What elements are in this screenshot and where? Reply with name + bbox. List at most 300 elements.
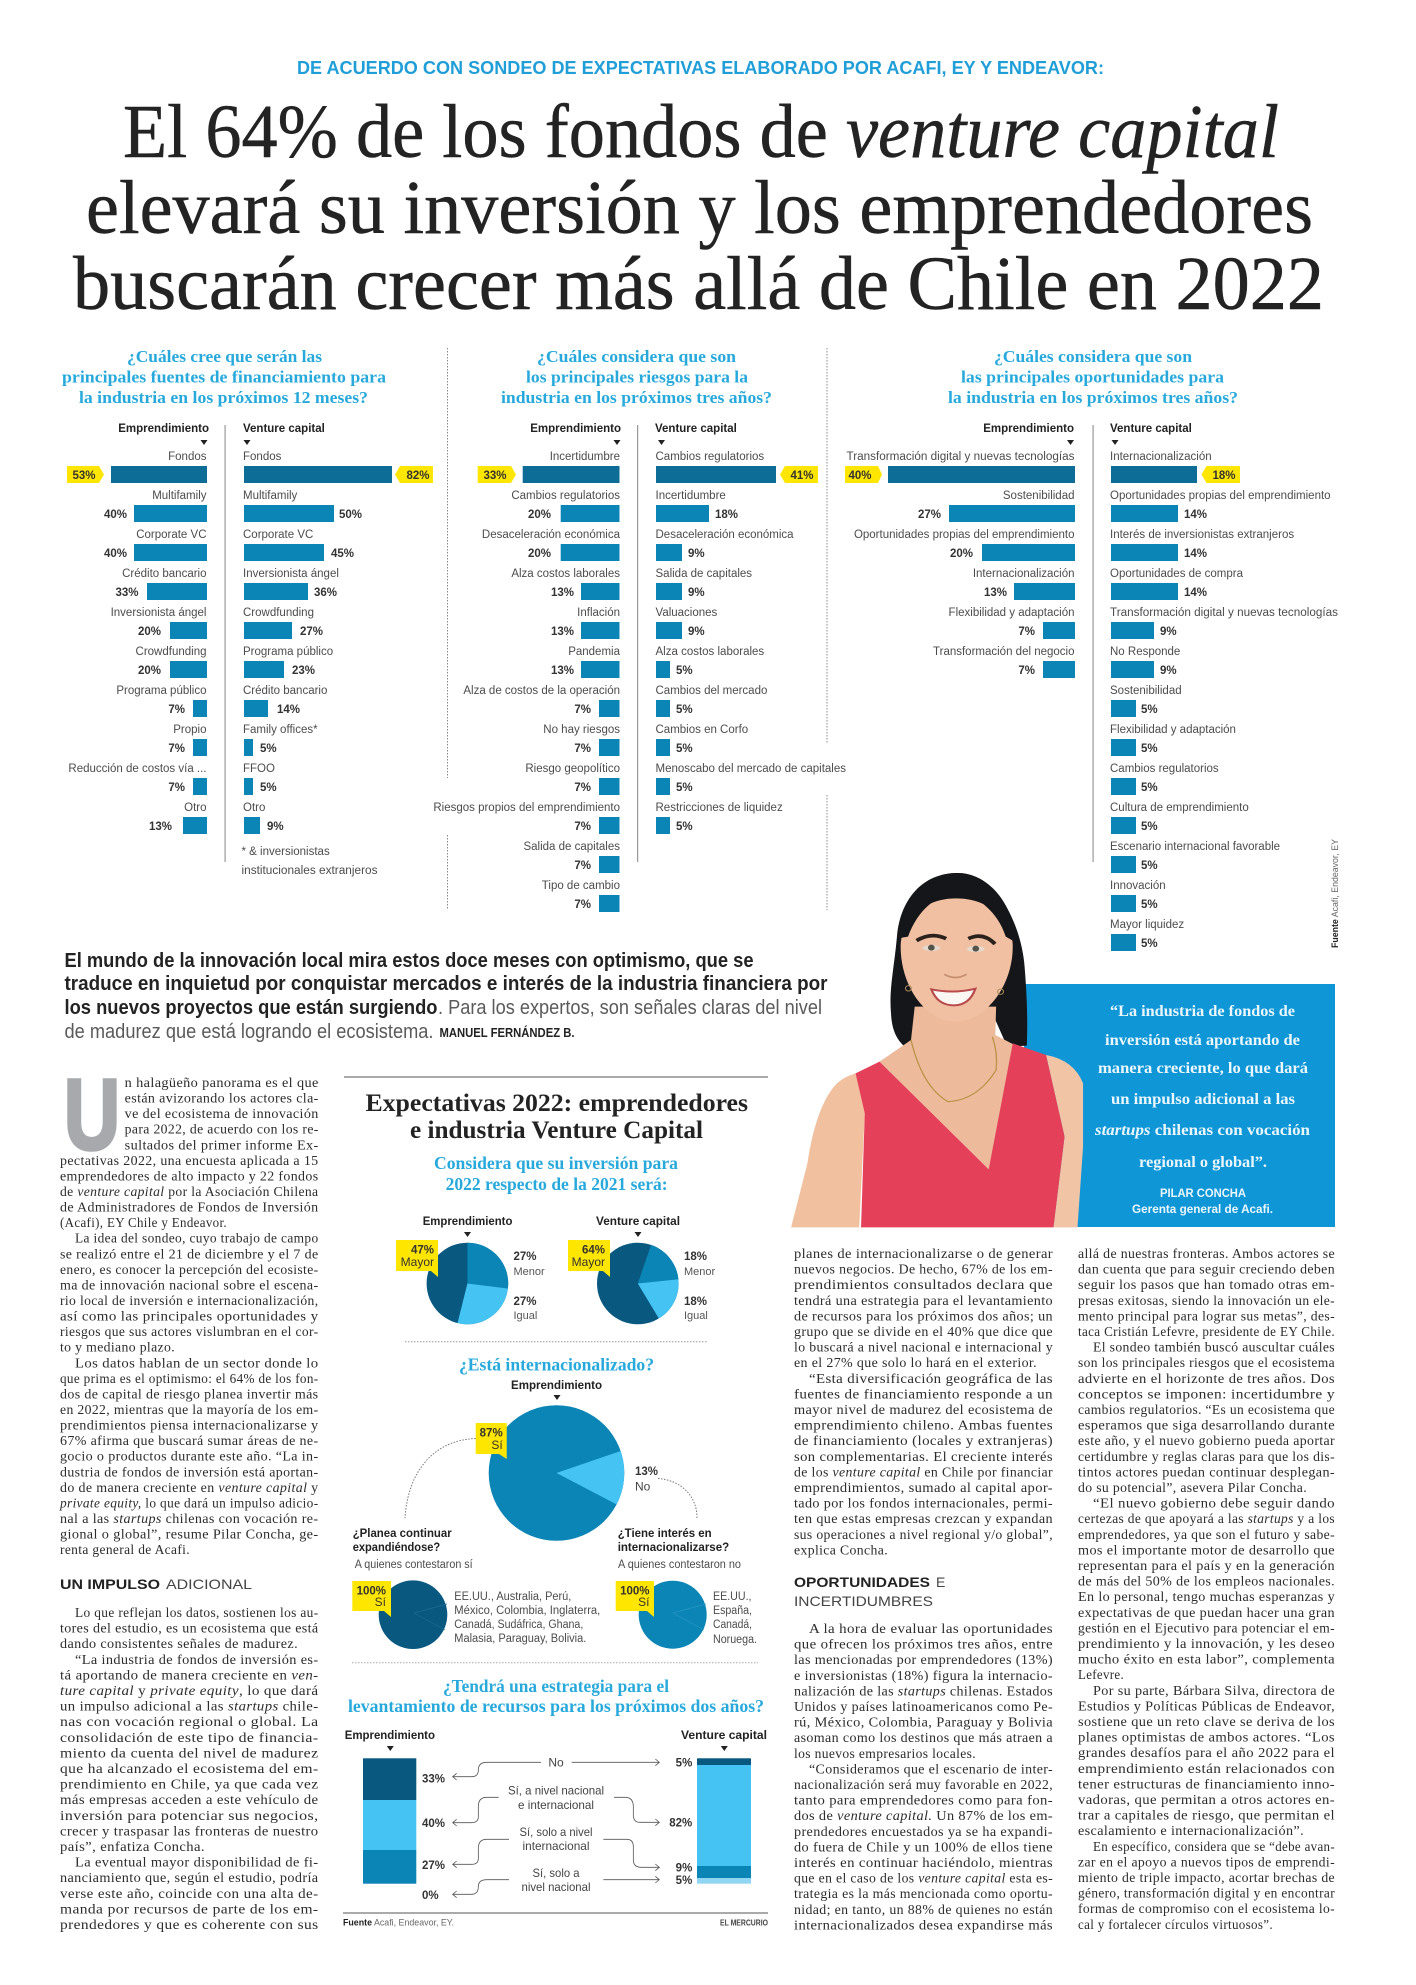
paragraph: sondeo riesgos: El sondeo también buscó auscultar cuáles [1093,1340,1335,1355]
bar chart: riesgos emprendimiento: Riesgos propios del emprendimiento [433,802,620,814]
bar chart: riesgos emprendimiento: Incertidumbre [550,451,620,463]
bar chart: oportunidades venture capital: 14% [1184,548,1207,560]
bar chart: financiamiento venture capital: 50% [339,509,362,521]
title: El 64% de los fondos de venture capital [123,90,1279,174]
paragraph: opening: de venture capital por la Asociación Chilena [60,1184,318,1199]
paragraph: nuevo gobierno [1078,1496,1335,1682]
block: interés en internacionalizarse: EE.UU., [713,1591,752,1603]
title [73,90,1324,326]
block: planea continuar: México, Colombia, Inglaterra, [454,1605,600,1617]
bar chart: oportunidades venture capital: Transformación digital y nuevas tecnologías [1110,607,1338,619]
bar chart: riesgos emprendimiento: 7% [574,860,591,872]
paragraph: datos: en 2022, mientras que la mayoría de los em- [60,1402,319,1417]
paragraph: consideramos: prendedores encuestados ya se ha expandi- [794,1824,1053,1839]
bar chart: financiamiento emprendimiento: 40% [104,509,127,521]
bar chart: riesgos venture capital: Cambios en Corfo [656,724,748,736]
paragraph: sondeo riesgos: certidumbre y reglas claras para que los dis- [1078,1449,1335,1464]
paragraph: a la hora: Unidos y países latinoamericanos como Pe- [794,1699,1053,1714]
heading: financiamiento: la industria en los próximos 12 meses? [79,388,368,407]
panel: Expectativas 2022 infographic: Emprendimiento [511,1380,602,1392]
bar chart: financiamiento emprendimiento: 20% [138,626,161,638]
paragraph: eventual [60,1855,319,1932]
paragraph: opening [60,1075,319,1230]
paragraph: sondeo riesgos: esperamos que siga desarrollando durante [1078,1418,1335,1433]
bar chart: riesgos venture capital: 5% [676,704,693,716]
panel: oportunidades: Emprendimiento [983,423,1074,435]
block: interés en internacionalizarse [616,1528,757,1649]
paragraph: quote: crecer y traspasar las fronteras de nuestro [60,1823,318,1838]
bar chart: oportunidades emprendimiento: Transformación del negocio [933,646,1074,658]
heading: estrategia [348,1676,764,1716]
bar chart: financiamiento emprendimiento: Propio [173,724,206,736]
paragraph: sondeo riesgos: advierte en el horizonte de tres años. Dos [1078,1371,1335,1386]
panel: Expectativas 2022 infographic: Emprendimiento [345,1730,435,1742]
bar chart: riesgos emprendimiento: Pandemia [568,646,621,658]
block: interés en internacionalizarse: Canadá, [713,1619,752,1631]
pie: emprendimiento inversión: 27% [514,1251,537,1263]
bar chart: oportunidades venture capital: 5% [1141,821,1158,833]
paragraph: eventual: manda por recursos de parte de los em- [60,1901,319,1916]
intro paragraph: de madurez que está logrando el ecosistema. [64,1021,434,1043]
bar chart: riesgos emprendimiento: 7% [574,743,591,755]
bar chart: oportunidades venture capital: 5% [1141,782,1158,794]
bar chart: oportunidades emprendimiento: 20% [950,548,973,560]
paragraph: a la hora: nalización de las startups chilenas. Estados [794,1683,1053,1698]
bar chart: riesgos emprendimiento: No hay riesgos [543,724,620,736]
intro paragraph: los nuevos proyectos que están surgiendo [64,997,438,1019]
heading: riesgos: los principales riesgos para la [526,368,748,386]
paragraph: allá: mento principal para lograr sus metas”, des- [1078,1308,1335,1323]
bar chart: riesgos venture capital: Cambios regulatorios [656,451,764,463]
heading: estrategia: ¿Tendrá una estrategia para el [443,1676,669,1696]
panel: riesgos: Venture capital [655,423,737,435]
bar chart: financiamiento emprendimiento: 33% [115,587,138,599]
paragraph: allá: dan cuenta que para seguir creciendo deben [1078,1262,1335,1277]
paragraph: diversificación: ten que estas empresas crezcan y expandan [794,1511,1053,1526]
paragraph: diversificación: sus operaciones a nivel regional y/o global”, [794,1527,1053,1542]
pie: emprendimiento inversión [396,1240,545,1324]
paragraph: diversificación: fuentes de financiamiento responde a un [794,1386,1053,1401]
bar chart: financiamiento venture capital: 27% [300,626,323,638]
bar chart: oportunidades emprendimiento: 40% [848,470,872,482]
quote text: startups chilenas con vocación [1094,1122,1310,1139]
block: planea continuar: ¿Planea continuar [353,1528,452,1540]
paragraph: opening: n halagüeño panorama es el que [125,1075,319,1090]
heading: riesgos: ¿Cuáles considera que son [537,347,736,366]
bar chart: financiamiento venture capital: 82% [406,470,430,482]
paragraph: eventual: prendedores y que es coherente con sus [60,1917,318,1932]
subheading: oportunidades e incertidumbres: INCERTIDUMBRES [794,1593,933,1609]
pie: venture capital inversión: Menor [684,1266,716,1278]
bar chart: financiamiento emprendimiento: Programa público [116,685,206,697]
paragraph: Bárbara Silva: planes optimistas de ambos actores. “Los [1078,1730,1335,1745]
paragraph: quote: ture capital y private equity , lo que dará [60,1683,318,1698]
paragraph: sondeo riesgos: conceptos se imponen: incertidumbre y [1078,1386,1335,1401]
bar chart: financiamiento venture capital: Crowdfunding [243,607,314,619]
quote attribution [1132,1188,1273,1216]
paragraph: allá [1078,1246,1335,1339]
stacked bar: emprendimiento: 40% [422,1818,445,1830]
bar chart: riesgos emprendimiento: 20% [528,548,551,560]
heading: oportunidades: las principales oportunidades para [961,368,1224,386]
bar chart: oportunidades venture capital: 5% [1141,704,1158,716]
paragraph: Bárbara Silva: vadoras, que permitan a otros actores en- [1078,1792,1335,1807]
bar chart: riesgos emprendimiento: 13% [551,587,574,599]
pie: emprendimiento inversión: 47% [411,1244,434,1256]
heading: considera: 2022 respecto de la 2021 será: [446,1174,668,1194]
paragraph: consideramos: nacionalización será muy favorable en 2022, [794,1777,1053,1792]
paragraph: consideramos: trategia es la más mencionada como oportu- [794,1886,1053,1901]
photo: Pilar Concha portrait [791,873,1083,1227]
bar chart: riesgos venture capital: 5% [676,782,693,794]
paragraph: datos: dos de capital de riesgo planea invertir más [60,1386,318,1401]
bar chart: riesgos emprendimiento: Riesgo geopolítico [525,763,620,775]
panel: oportunidades [845,347,1341,951]
bar chart: financiamiento venture capital: Otro [243,802,265,814]
credit: EL MERCURIO [720,1918,768,1928]
bar chart: oportunidades venture capital: Internacionalización [1110,451,1212,463]
paragraph: quote: “La industria de fondos de inversión es- [75,1652,319,1667]
bar chart: riesgos venture capital: 9% [688,548,705,560]
bar chart: riesgos emprendimiento: Alza de costos de la operación [463,685,620,697]
bar chart: financiamiento venture capital: Corporate VC [243,529,313,541]
bar chart: financiamiento emprendimiento: 13% [149,821,172,833]
paragraph: sondeo: La idea del sondeo, cuyo trabajo de campo [75,1231,318,1246]
bar chart: financiamiento emprendimiento [67,451,207,834]
bar chart: oportunidades venture capital: 5% [1141,860,1158,872]
paragraph: a la hora: e inversionistas (18%) figura la internacio- [794,1668,1053,1683]
bar chart: riesgos venture capital: 5% [676,665,693,677]
bar chart: riesgos venture capital: Incertidumbre [656,490,726,502]
intro paragraph: MANUEL FERNÁNDEZ B. [440,1025,574,1040]
footnote: * & inversionistas [242,846,330,858]
intro paragraph: traduce en inquietud por conquistar mercados e interés de la industria financiera por [64,973,828,995]
pie: venture capital inversión: 18% [684,1251,707,1263]
bar chart: riesgos emprendimiento [433,451,621,912]
bar chart: oportunidades emprendimiento: Sostenibilidad [1003,490,1074,502]
paragraph: sondeo riesgos: do su potencial”, asevera Pilar Concha. [1078,1480,1307,1495]
bar chart: riesgos venture capital: Valuaciones [656,607,718,619]
bar chart: financiamiento emprendimiento: Otro [184,802,206,814]
stacked bar: emprendimiento [363,1758,445,1902]
bar chart: oportunidades venture capital [1110,451,1338,951]
bar chart: riesgos emprendimiento: 7% [574,821,591,833]
heading: financiamiento: ¿Cuáles cree que serán las [127,347,323,366]
pie: emprendimiento inversión: 27% [514,1296,537,1308]
paragraph: planes: tendrá una estrategia para el levantamiento [794,1293,1053,1308]
paragraph: eventual: La eventual mayor disponibilidad de fi- [75,1855,319,1870]
bar chart: financiamiento venture capital: 23% [292,665,315,677]
subheading: oportunidades e incertidumbres: E [936,1574,945,1590]
paragraph: opening: emprendedores de alto impacto y 22 fondos [60,1168,318,1183]
paragraph: diversificación: de los venture capital en Chile por financiar [794,1464,1053,1479]
paragraph: quote: más empresas acceden a este vehículo de [60,1792,318,1807]
paragraph: a la hora: rú, México, Colombia, Paraguay y Bolivia [794,1715,1053,1730]
paragraph: sondeo riesgos: tintos actores puedan continuar desplegan- [1078,1464,1335,1479]
bar chart: riesgos venture capital: Cambios del mercado [656,685,767,697]
pie: emprendimiento inversión: Menor [514,1266,545,1278]
paragraph: diversificación: son complementarias. El creciente interés [794,1449,1053,1464]
panel: riesgos [433,347,846,912]
paragraph: consideramos [794,1761,1053,1932]
paragraph: sondeo riesgos: este año, y el nuevo gobierno pueda aportar [1078,1433,1335,1448]
block: interés en internacionalizarse: internacionalizarse? [618,1542,729,1554]
stacked bar: venture capital: 82% [669,1818,692,1830]
block: interés en internacionalizarse: A quienes contestaron no [618,1559,741,1571]
paragraph: quote: consolidación de este tipo de financia- [60,1730,319,1745]
subheading: un impulso adicional: UN IMPULSO [60,1576,160,1592]
bar chart: riesgos venture capital: 41% [790,470,814,482]
paragraph: consideramos: nidad; en tanto, un 88% de quienes no están [794,1902,1053,1917]
heading: financiamiento [62,347,386,407]
bar chart: oportunidades emprendimiento: Flexibilidad y adaptación [949,607,1074,619]
block: planea continuar: Canadá, Sudáfrica, Ghana, [454,1619,583,1631]
block: interés en internacionalizarse: ¿Tiene interés en [618,1528,712,1540]
paragraph: opening: están avizorando los actores cla- [125,1091,319,1106]
bar chart: oportunidades venture capital: 5% [1141,899,1158,911]
pie: venture capital inversión: Igual [684,1310,708,1322]
bar chart: financiamiento venture capital: 5% [260,743,277,755]
heading: oportunidades: la industria en los próximos tres años? [948,388,1238,407]
strategy category labels [508,1756,604,1894]
body text: column 3 [1078,1246,1335,1932]
paragraph: en específico: formas de compromiso con el ecosistema lo- [1078,1901,1335,1916]
paragraph: planes: prendimientos consultados declara que [794,1277,1053,1292]
paragraph: diversificación: emprendimiento chileno. Ambas fuentes [794,1418,1053,1433]
bar chart: financiamiento emprendimiento: Inversionista ángel [111,607,206,619]
paragraph: datos: dustria de fondos de inversión está aportan- [60,1464,319,1479]
bar chart: oportunidades emprendimiento: Internacionalización [973,568,1074,580]
paragraph: quote: un impulso adicional a las startups chile- [60,1699,319,1714]
paragraph: planes: en el 27% que solo lo hará en el exterior. [794,1355,1037,1370]
strategy category labels: No [548,1756,564,1770]
paragraph: Bárbara Silva [1078,1683,1335,1838]
bar chart: financiamiento venture capital: 9% [267,821,284,833]
bar chart: financiamiento venture capital: Crédito bancario [243,685,327,697]
drop cap: U [64,1059,120,1171]
paragraph: allá: seguir los pasos que han tomado otras em- [1078,1277,1335,1292]
paragraph: quote: país”, enfatiza Concha. [60,1839,205,1854]
bar chart: riesgos venture capital: 9% [688,587,705,599]
paragraph: Bárbara Silva: emprendimiento están relacionados con [1078,1761,1335,1776]
paragraph: nuevo gobierno: certezas de que apoyará a las startups y a los [1078,1511,1335,1526]
bar chart: oportunidades emprendimiento: 7% [1018,626,1035,638]
bar chart: financiamiento venture capital: Programa público [243,646,333,658]
bar chart: riesgos emprendimiento: Tipo de cambio [542,880,620,892]
bar chart: riesgos emprendimiento: Salida de capitales [523,841,620,853]
bar chart: financiamiento emprendimiento: Reducción de costos vía ... [68,763,206,775]
paragraph: nuevo gobierno: de más del 50% de los empleos nacionales. [1078,1574,1335,1589]
heading: estrategia: levantamiento de recursos para los próximos dos años? [348,1696,764,1716]
bar chart: oportunidades venture capital: 14% [1184,587,1207,599]
panel: fuentes de financiamiento: Venture capital [243,423,325,435]
paragraph: allá: taca Cristián Lefevre, presidente de EY Chile. [1078,1324,1335,1339]
paragraph: diversificación: tado por los fondos internacionales, permi- [794,1496,1053,1511]
pie: venture capital inversión [568,1240,716,1324]
bar chart: riesgos emprendimiento: 7% [574,899,591,911]
bar chart: financiamiento emprendimiento: 7% [168,743,185,755]
paragraph: consideramos: dos de venture capital. Un 87% de los em- [794,1808,1053,1823]
bar chart: oportunidades emprendimiento: 13% [984,587,1007,599]
stacked bar: venture capital: 5% [676,1758,692,1770]
paragraph: Bárbara Silva: Por su parte, Bárbara Silva, directora de [1093,1683,1335,1698]
bar chart: oportunidades emprendimiento: 7% [1018,665,1035,677]
paragraph: a la hora: que ofrecen los próximos tres años, entre [794,1637,1053,1652]
bar chart: riesgos emprendimiento: 7% [574,704,591,716]
pie: emprendimiento inversión: Mayor [401,1255,434,1269]
paragraph: datos: do de manera creciente en venture capital y [60,1480,318,1495]
paragraph: nuevo gobierno: representan para el país y en la generación [1078,1558,1335,1573]
bar chart: oportunidades emprendimiento: Transformación digital y nuevas tecnologías [846,451,1075,463]
pie: venture capital inversión: Mayor [572,1255,605,1269]
subheading: oportunidades e incertidumbres [794,1574,945,1609]
paragraph: Bárbara Silva: trar a capitales de riesgo, que permitan el [1078,1808,1335,1823]
bar chart: oportunidades venture capital: 5% [1141,938,1158,950]
paragraph: en específico: En específico, considera que se “debe avan- [1093,1839,1335,1854]
block: planea continuar [352,1528,600,1649]
paragraph: consideramos: internacionalizados desea expandirse más [794,1917,1053,1932]
bar chart: oportunidades venture capital: Oportunidades de compra [1110,568,1244,580]
paragraph: Bárbara Silva: tener estructuras de financiamiento inno- [1078,1776,1335,1791]
subheading: un impulso adicional [60,1576,252,1592]
quote text: regional o global”. [1139,1154,1267,1171]
paragraph: quote [60,1652,319,1854]
block: planea continuar: expandiéndose? [353,1542,440,1554]
bar chart: riesgos venture capital: 18% [715,509,738,521]
block: planea continuar: A quienes contestaron sí [355,1559,473,1571]
bar chart: financiamiento emprendimiento: Corporate VC [136,529,206,541]
strategy category labels: nivel nacional [522,1880,590,1894]
paragraph: a la hora: los nuevos empresarios locales. [794,1746,976,1761]
paragraph: opening: (Acafi), EY Chile y Endeavor. [60,1215,227,1230]
bar chart: financiamiento venture capital: 45% [331,548,354,560]
heading: financiamiento: principales fuentes de financiamiento para [62,368,386,386]
quote text: “La industria de fondos de [1110,1003,1295,1020]
paragraph: nuevo gobierno: mos el importante motor de desarrollo que [1078,1542,1335,1557]
bar chart: oportunidades venture capital: 5% [1141,743,1158,755]
paragraph: en específico: miento de triple impacto, acortar brechas de [1078,1870,1335,1885]
paragraph: planes [794,1246,1053,1370]
block: interés en internacionalizarse: Noruega. [713,1634,757,1646]
paragraph: opening: para 2022, de acuerdo con los re- [125,1122,319,1137]
panel: quote box [1024,984,1335,1227]
pie: está internacionalizado: 87% [480,1428,503,1440]
block: interés en internacionalizarse: España, [713,1605,752,1617]
paragraph: sondeo: así como las principales oportunidades y [60,1309,318,1324]
bar chart: financiamiento venture capital: Inversionista ángel [243,568,339,580]
paragraph: planes: nuevos negocios. De hecho, 67% de los em- [794,1262,1053,1277]
paragraph: a la hora: las mencionadas por emprendedores (13%) [794,1652,1053,1667]
bar chart: financiamiento venture capital: Fondos [243,451,282,463]
paragraph: planes: planes de internacionalizarse o de generar [794,1246,1053,1261]
bar chart: riesgos venture capital: 5% [676,743,693,755]
paragraph: Bárbara Silva: escalamiento e internacionalización”. [1078,1823,1304,1838]
panel title: Expectativas 2022: emprendedores [366,1090,748,1117]
panel: fuentes de financiamiento [62,347,433,877]
block: interés en internacionalizarse: 100% [620,1586,650,1598]
bar chart: oportunidades venture capital: 14% [1184,509,1207,521]
panel: Expectativas 2022 infographic: Venture capital [681,1730,767,1742]
kicker: DE ACUERDO CON SONDEO DE EXPECTATIVAS ELABORADO POR ACAFI, EY Y ENDEAVOR: [297,58,1104,78]
paragraph: en específico: zar en el apoyo a nuevos tipos de emprendi- [1078,1854,1335,1869]
stacked bar: emprendimiento: 0% [422,1890,439,1902]
paragraph: sondeo: enero, es conocer la percepción del ecosiste- [60,1262,319,1277]
bar chart: financiamiento emprendimiento: 7% [168,782,185,794]
paragraph: datos: que prima es el optimismo: el 64% de los fon- [60,1371,319,1386]
panel title: e industria Venture Capital [410,1117,703,1144]
paragraph: Bárbara Silva: sostiene que un reto clave se deriva de los [1078,1714,1335,1729]
bar chart: oportunidades emprendimiento: Oportunidades propias del emprendimiento [854,529,1074,541]
paragraph: datos: private equity, lo que dará un impulso adicio- [59,1495,319,1510]
paragraph: a la hora [794,1621,1053,1761]
paragraph: lo que reflejan: tores del estudio, es un ecosistema que está [60,1621,318,1636]
paragraph: planes: grupo que se divide en el 40% que dice que [794,1324,1053,1339]
pie: venture capital inversión: 64% [582,1244,605,1256]
paragraph: consideramos: que en el caso de los venture capital esta es- [794,1871,1053,1886]
title: elevará su inversión y los emprendedores [86,166,1313,250]
paragraph: planes: de recursos para los próximos dos años; un [794,1308,1053,1323]
bar chart: riesgos venture capital [656,451,846,834]
bar chart: oportunidades venture capital: Interés de inversionistas extranjeros [1110,529,1294,541]
stacked bar: venture capital: 9% [676,1862,692,1874]
bar chart: financiamiento venture capital: Multifamily [243,490,298,502]
paragraph: datos: gional o global”, resume Pilar Concha, ge- [60,1526,319,1542]
subheading: oportunidades e incertidumbres: OPORTUNIDADES [794,1574,930,1590]
paragraph: quote: tá aportando de manera creciente en ven- [60,1667,319,1682]
bar chart: oportunidades venture capital: Escenario internacional favorable [1110,841,1280,853]
panel: riesgos: Emprendimiento [530,423,621,435]
block: planea continuar: Sí [375,1595,387,1609]
bar chart: riesgos emprendimiento: Desaceleración económica [482,529,621,541]
pie: venture capital inversión: 18% [684,1296,707,1308]
heading: considera: Considera que su inversión para [434,1153,678,1173]
bar chart: oportunidades venture capital: Cultura de emprendimiento [1110,802,1249,814]
paragraph: nuevo gobierno: En lo personal, tengo muchas esperanzas y [1078,1589,1335,1604]
paragraph: consideramos: interés en continuar haciéndolo, mientras [794,1855,1053,1870]
heading: oportunidades [948,347,1238,407]
paragraph: datos: renta general de Acafi. [60,1542,190,1557]
paragraph: lo que reflejan: dando consistentes señales de madurez. [60,1636,298,1651]
paragraph: datos: nal a las startups chilenas con vocación re- [60,1511,319,1526]
bar chart: oportunidades venture capital: 18% [1212,470,1236,482]
paragraph: nuevo gobierno: “El nuevo gobierno debe seguir dando [1093,1496,1335,1511]
bar chart: financiamiento venture capital: Family offices* [243,724,318,736]
bar chart: oportunidades venture capital: No Responde [1110,646,1180,658]
heading: internacionalizado: ¿Está internacionalizado? [459,1354,654,1374]
intro paragraph: . Para los expertos, son señales claras del nivel [438,997,822,1019]
footnote [242,846,378,877]
bar chart: financiamiento venture capital: 14% [277,704,300,716]
paragraph: diversificación: mayor nivel de madurez del ecosistema de [794,1402,1053,1417]
paragraph: datos: prendimientos piensa internacionalizarse y [60,1418,318,1432]
paragraph: nuevo gobierno: expectativas de que puedan hacer una gran [1078,1605,1335,1620]
subheading: un impulso adicional: ADICIONAL [166,1576,252,1592]
bar chart: financiamiento venture capital [243,451,433,834]
paragraph: datos: Los datos hablan de un sector donde lo [75,1355,318,1370]
paragraph: sondeo riesgos [1078,1340,1335,1495]
bar chart: financiamiento venture capital: 36% [314,587,337,599]
bar chart: riesgos venture capital: Menoscabo del mercado de capitales [656,763,846,775]
paragraph: allá: presas exitosas, siendo la innovación un ele- [1078,1293,1335,1308]
bar chart: financiamiento emprendimiento: 20% [138,665,161,677]
paragraph: nuevo gobierno: Lefevre. [1078,1667,1124,1682]
bar chart: financiamiento emprendimiento: Multifamily [152,490,207,502]
paragraph: quote: inversión para potenciar sus negocios, [60,1808,318,1823]
stacked bar: emprendimiento: 33% [422,1774,445,1786]
pie: está internacionalizado [476,1405,658,1541]
paragraph: nuevo gobierno: emprendedores, ya que son el futuro y sabe- [1078,1527,1335,1542]
body text: column 1 [59,1075,319,1932]
